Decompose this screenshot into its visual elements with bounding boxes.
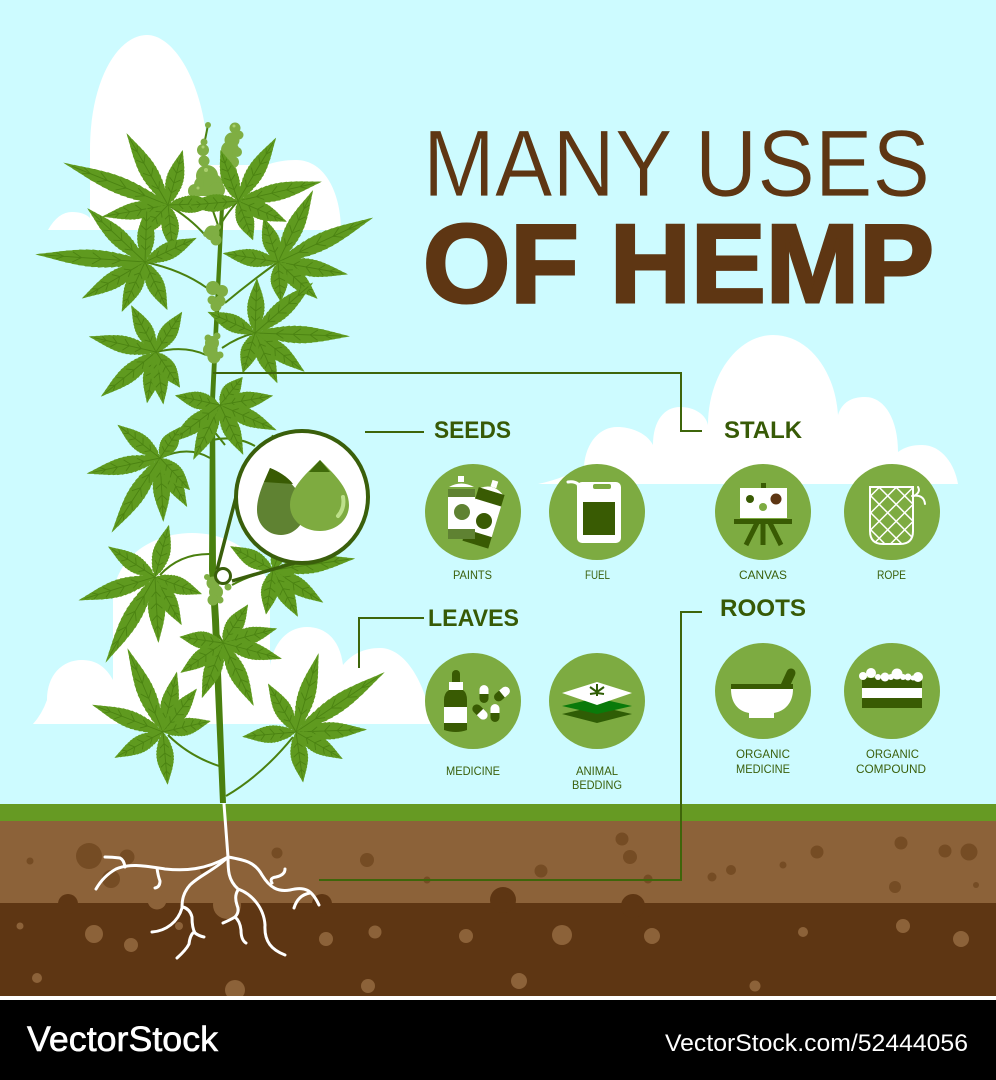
connector: roots	[319, 612, 702, 880]
seed buds: cluster 2	[203, 224, 222, 246]
footer url: VectorStock.com/52444056	[665, 1030, 968, 1057]
use: organic medicine: MEDICINE	[736, 764, 790, 776]
heading: seeds: SEEDS	[434, 417, 511, 444]
plant stem	[209, 207, 226, 803]
cloud: top left	[48, 35, 341, 230]
use: animal bedding: ANIMAL	[576, 766, 619, 778]
leaf stalks	[145, 201, 293, 796]
use: medicine	[425, 653, 521, 778]
title: OF HEMP	[423, 202, 934, 326]
connector: seeds	[365, 431, 424, 433]
leaf 6	[87, 301, 190, 406]
leaf 2	[186, 133, 324, 243]
use: animal bedding: BEDDING	[572, 780, 622, 792]
heading: leaves: LEAVES	[428, 605, 519, 632]
use: canvas: CANVAS	[739, 570, 787, 582]
use: fuel	[549, 464, 645, 582]
ground: grass band	[0, 804, 996, 821]
use: organic compound: ORGANIC	[866, 749, 919, 761]
heading: stalk: STALK	[724, 417, 802, 444]
leaf 9	[76, 523, 205, 667]
callout: seed oil drops	[216, 431, 368, 584]
ground: upper soil	[0, 821, 996, 903]
leaf 12	[89, 645, 213, 786]
use: rope: ROPE	[877, 570, 906, 582]
use: paints: PAINTS	[453, 570, 492, 582]
white strip	[0, 996, 996, 1000]
leaf 13	[241, 651, 390, 784]
use: organic medicine	[715, 643, 811, 776]
icon: dark oil drop	[257, 468, 305, 535]
use: canvas	[715, 464, 811, 582]
leaf 11	[175, 600, 284, 710]
seed buds: cluster 4	[203, 332, 224, 364]
cloud: behind stalk	[538, 335, 958, 484]
icon: light oil drop	[290, 460, 349, 531]
soil spots: lower layer	[16, 890, 969, 1000]
use: paints	[425, 464, 521, 582]
cloud: lower	[33, 533, 432, 724]
footer bar	[0, 1000, 996, 1080]
leaf 3	[35, 202, 200, 316]
title	[423, 111, 934, 326]
seed buds: cluster 3	[206, 281, 228, 312]
leaf 1	[60, 129, 218, 252]
soil spots: upper layer	[26, 832, 979, 893]
seed buds: top cluster	[188, 122, 244, 198]
use: medicine: MEDICINE	[446, 766, 500, 778]
heading: roots: ROOTS	[720, 595, 806, 622]
use: organic compound: COMPOUND	[856, 764, 926, 776]
soil bumps: dark into upper layer	[58, 887, 645, 918]
ground: lower soil	[0, 903, 996, 996]
use: organic medicine: ORGANIC	[736, 749, 790, 761]
connector: stalk	[213, 373, 702, 431]
title: MANY USES	[423, 111, 930, 217]
use: rope	[844, 464, 940, 582]
leaf 5	[204, 276, 350, 387]
sky background	[0, 0, 996, 805]
leaf 8	[85, 418, 196, 537]
use: fuel: FUEL	[585, 570, 611, 582]
leaf 7	[164, 371, 299, 472]
seed buds: cluster 5	[204, 574, 232, 606]
use: organic compound	[844, 643, 940, 776]
footer logo: VectorStock	[27, 1020, 219, 1059]
plant roots	[96, 804, 319, 958]
leaf 4	[221, 186, 377, 305]
connector: leaves	[359, 618, 424, 668]
leaf 10	[226, 520, 356, 621]
use: animal bedding	[549, 653, 645, 792]
